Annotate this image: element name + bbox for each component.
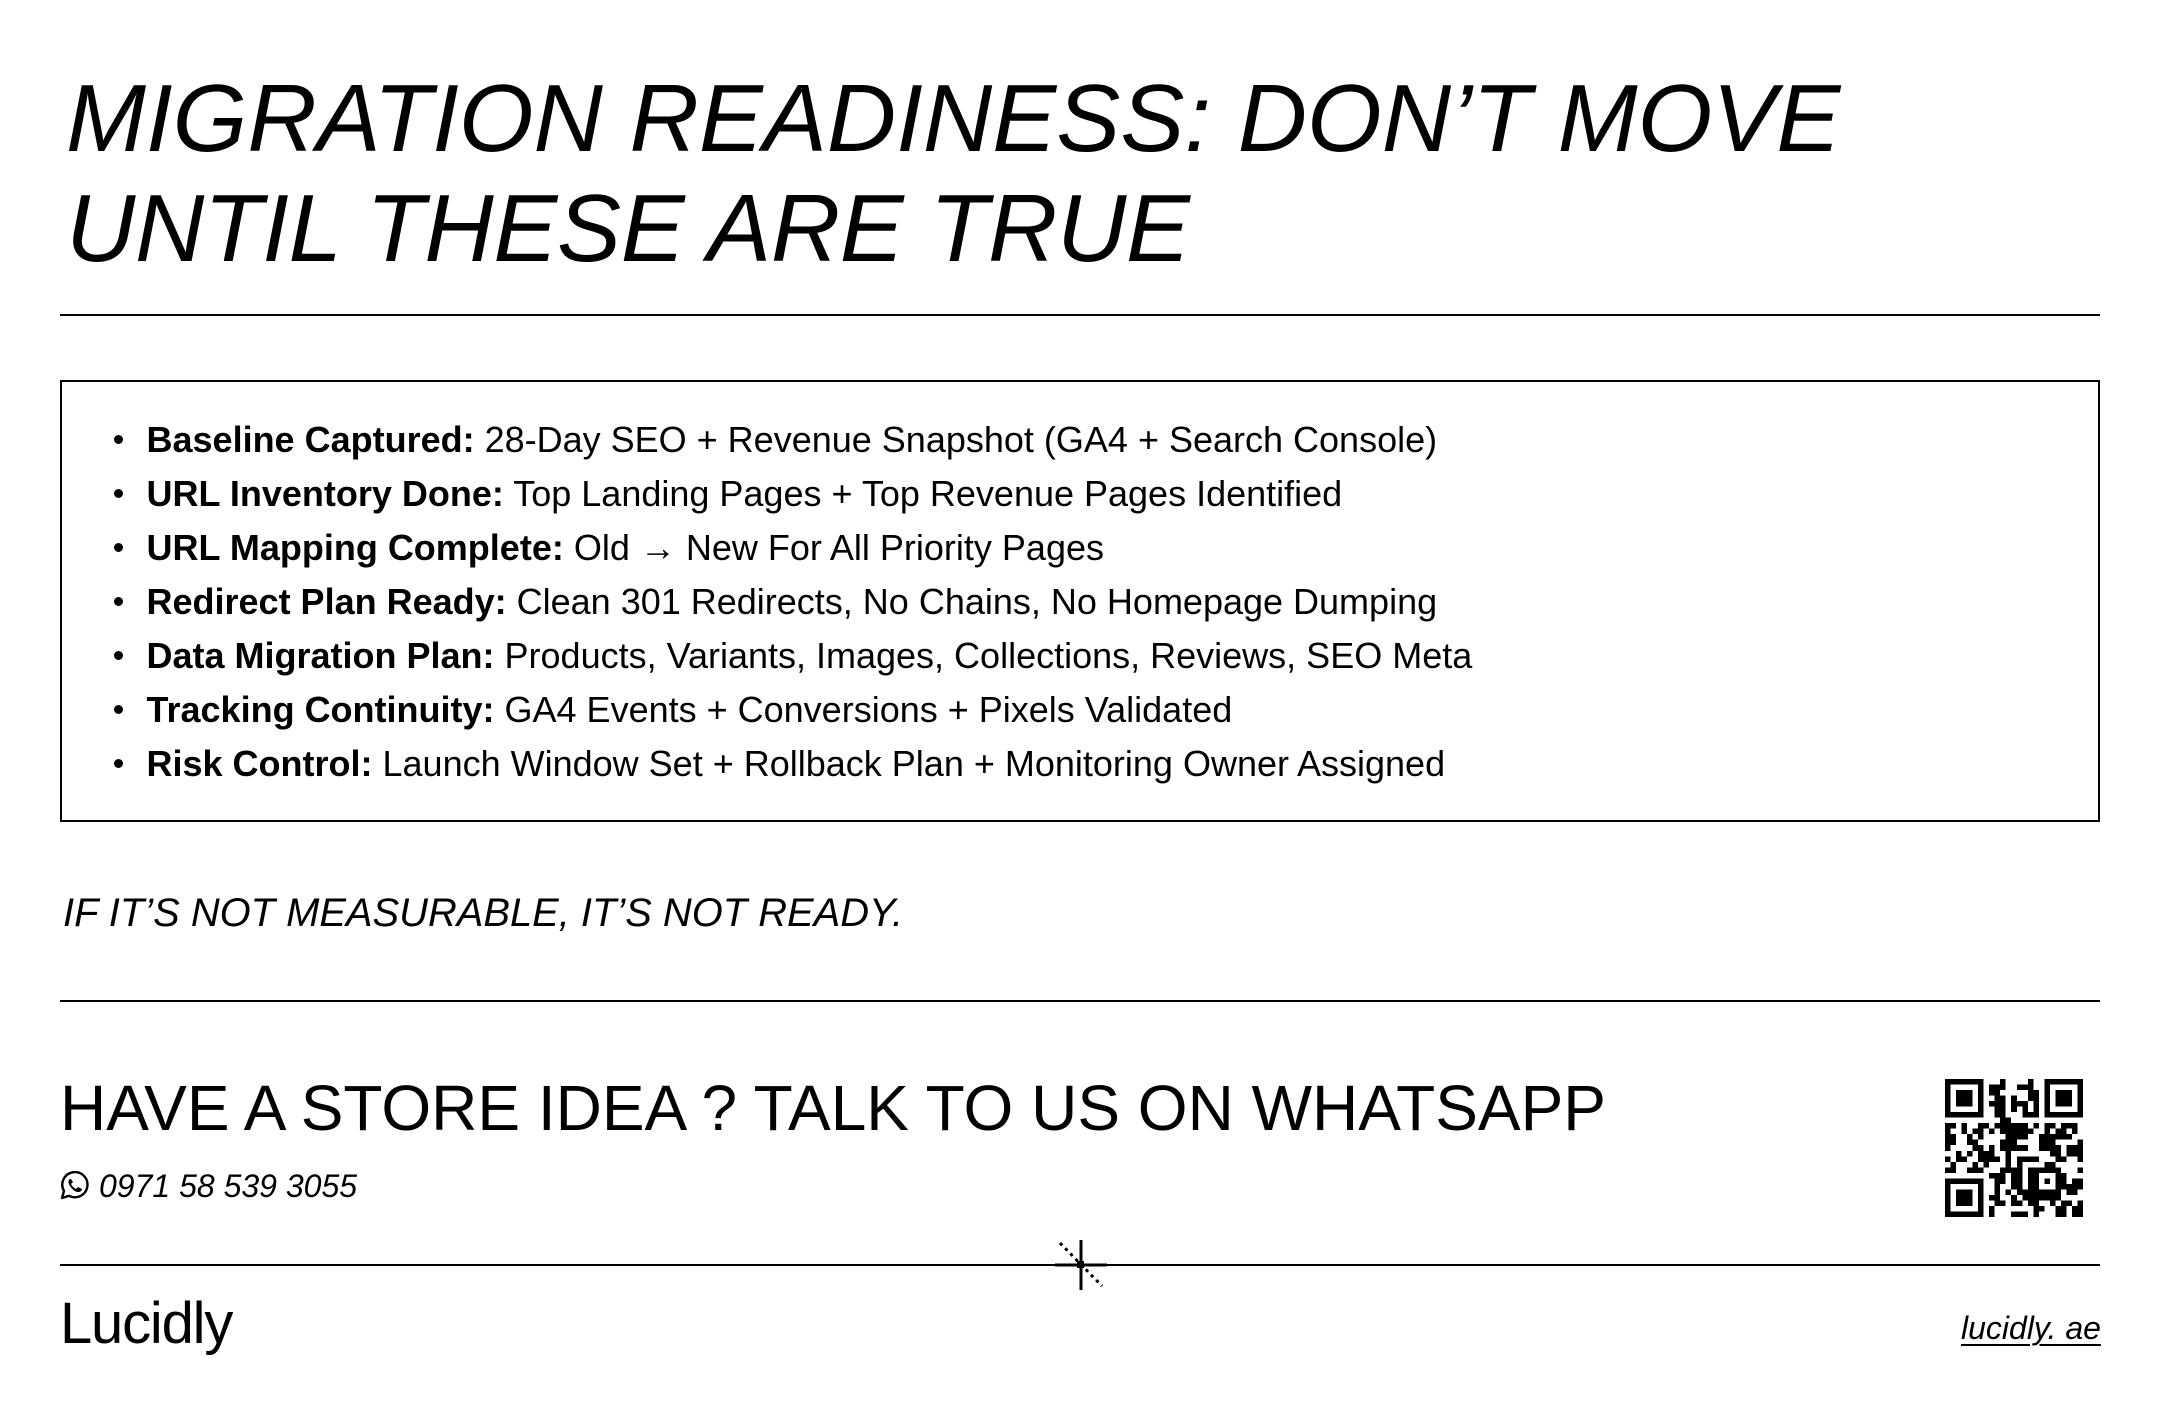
call to action heading: HAVE A STORE IDEA ? TALK TO US ON WHATSAPP (60, 1072, 1606, 1144)
checklist item: baseline captured: Baseline Captured: 28-Day SEO + Revenue Snapshot (GA4 + Search Console) (146, 419, 1437, 460)
phone number: 0971 58 539 3055 (99, 1168, 357, 1204)
icon: crosshair mark (1055, 1240, 1107, 1290)
checklist item: url mapping: URL Mapping Complete: Old → New For All Priority Pages (146, 527, 1104, 568)
checklist item: risk control: Risk Control: Launch Window Set + Rollback Plan + Monitoring Owner Assigned (146, 743, 1445, 784)
tagline: IF IT’S NOT MEASURABLE, IT’S NOT READY. (63, 890, 903, 934)
website link: lucidly. ae (1961, 1310, 2101, 1346)
title (66, 65, 1842, 282)
checklist item: redirect plan: Redirect Plan Ready: Clean 301 Redirects, No Chains, No Homepage Dumping (146, 581, 1437, 622)
logo: Lucidly: Lucidly (60, 1291, 232, 1356)
icon: whatsapp (60, 1171, 89, 1200)
panel: readiness checklist (60, 380, 2100, 822)
checklist item: url inventory: URL Inventory Done: Top Landing Pages + Top Revenue Pages Identified (146, 473, 1342, 514)
qr code (1945, 1079, 2083, 1217)
title: UNTIL THESE ARE TRUE (66, 175, 1190, 282)
checklist item: data migration: Data Migration Plan: Products, Variants, Images, Collections, Reviews, SEO Meta (146, 635, 1472, 676)
checklist item: tracking continuity: Tracking Continuity: GA4 Events + Conversions + Pixels Validated (146, 689, 1232, 730)
title: MIGRATION READINESS: DON’T MOVE (66, 65, 1840, 172)
